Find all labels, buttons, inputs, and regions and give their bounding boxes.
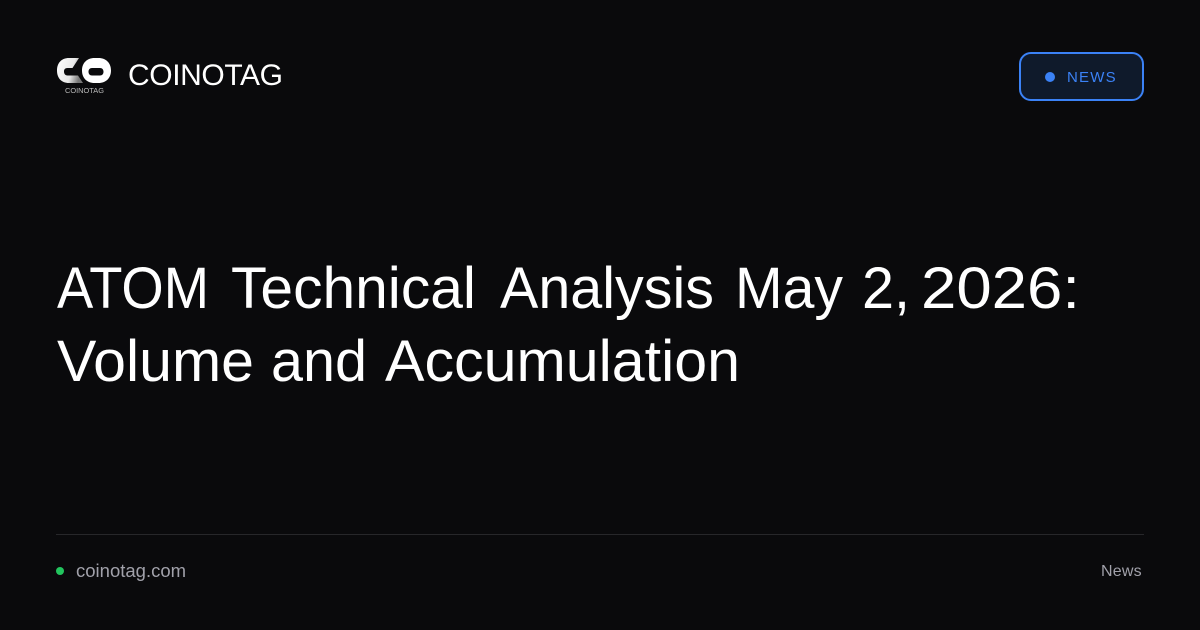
title: ATOM	[57, 256, 209, 321]
brand name: COINOTAG	[128, 59, 283, 92]
badge label: NEWS	[1067, 69, 1117, 86]
icon: coinotag mark	[57, 58, 111, 95]
divider	[56, 534, 1144, 535]
title: Technical	[231, 256, 476, 321]
logo	[57, 58, 283, 95]
title: and	[271, 329, 367, 394]
footer: category: News	[1101, 563, 1142, 580]
title: 2,	[862, 256, 910, 321]
badge dot	[1045, 72, 1055, 82]
title: May	[735, 256, 843, 321]
status dot	[56, 567, 64, 575]
title: Accumulation	[385, 329, 740, 394]
site url: coinotag.com	[76, 560, 186, 581]
title: Analysis	[500, 256, 714, 321]
title	[57, 256, 1080, 394]
title: Volume	[57, 329, 254, 394]
footer: site	[56, 560, 186, 581]
badge: news	[1019, 52, 1144, 101]
icon: coinotag mark: COINOTAG	[65, 88, 104, 95]
title: 2026:	[921, 256, 1080, 321]
